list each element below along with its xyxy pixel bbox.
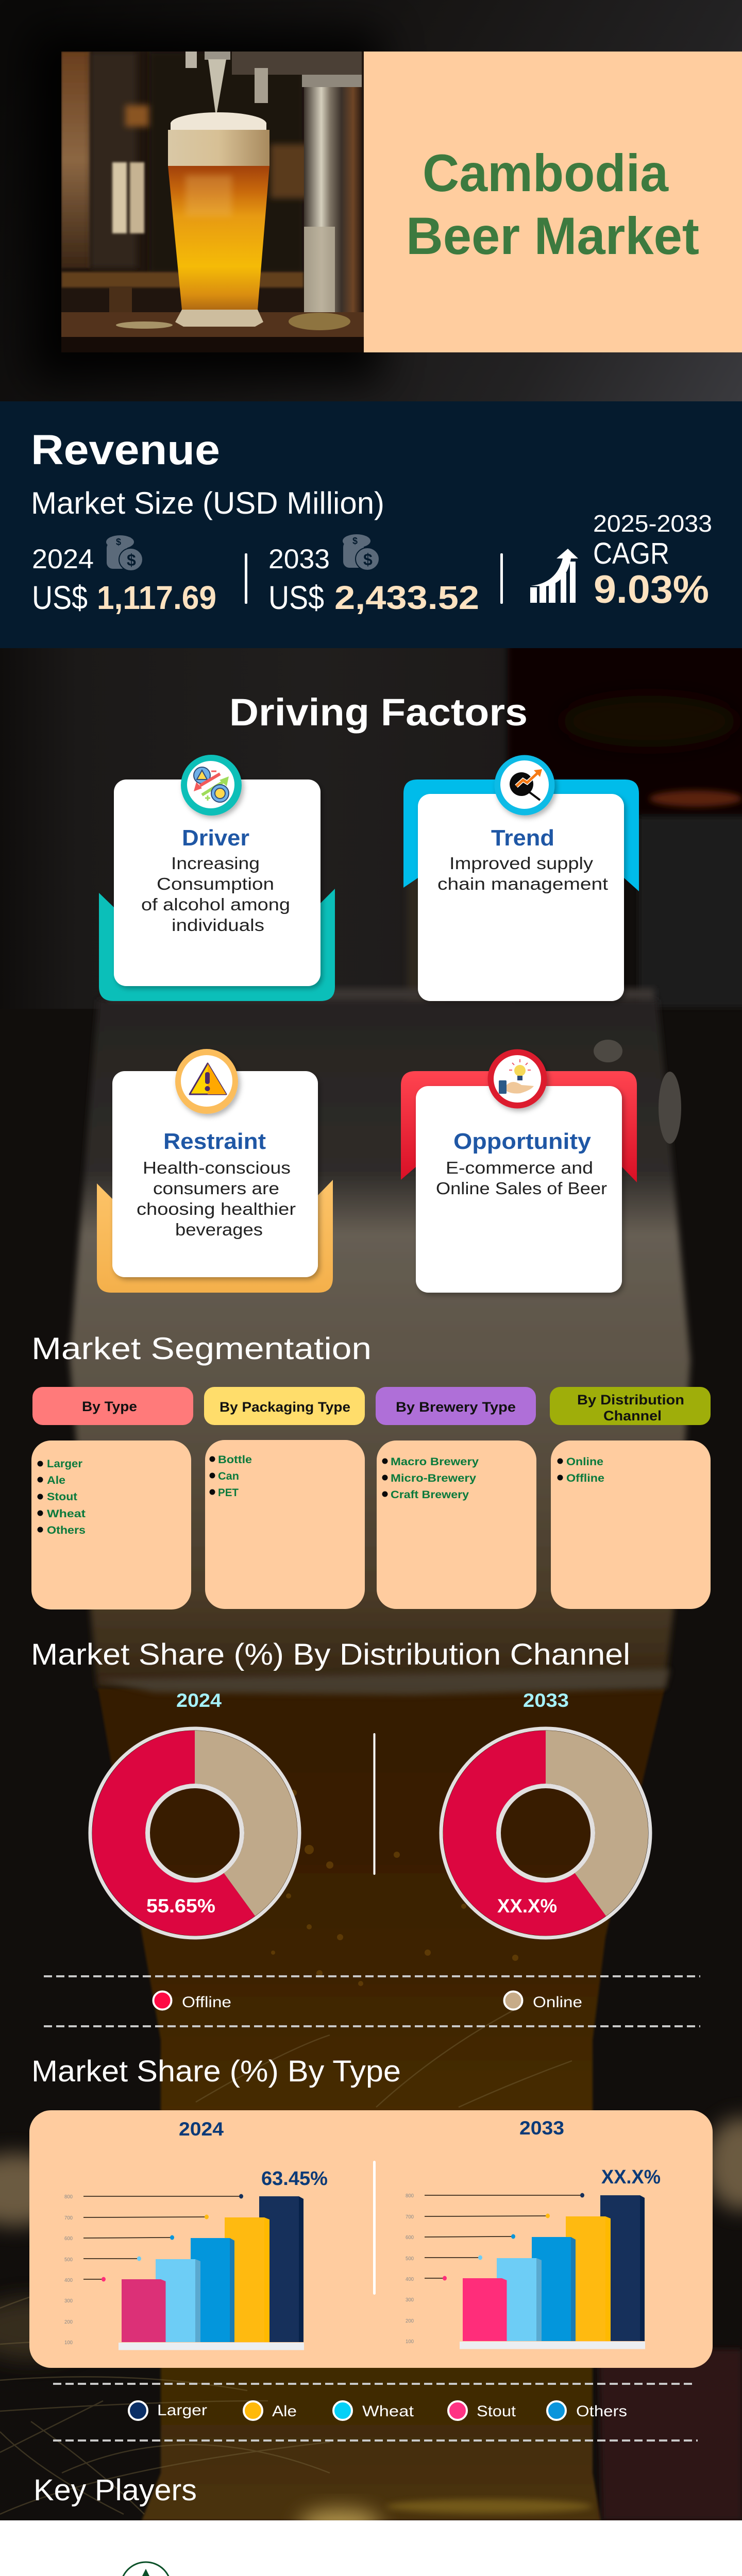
segment header: by brewery type <box>376 1387 536 1425</box>
bar chart 2033: 200 <box>406 2318 414 2324</box>
segment panel: brewery list: Micro-Brewery <box>391 1472 476 1484</box>
revenue heading: Revenue <box>31 427 220 473</box>
segment panel: distribution list: Offline <box>566 1472 604 1484</box>
segment panel: type list: Ale <box>47 1475 65 1486</box>
segment panel: brewery list: Craft Brewery <box>391 1489 469 1501</box>
legend: online <box>504 1992 582 2011</box>
legend: larger <box>129 2401 207 2420</box>
value 2033 <box>268 579 479 616</box>
bar chart 2033: XX.X% <box>601 2166 661 2188</box>
opportunity title: Opportunity <box>453 1129 592 1154</box>
donut chart 2033 <box>441 1728 650 1938</box>
segment header: by distribution channel: By Distribution <box>577 1392 684 1408</box>
legend: ale: Ale <box>272 2403 297 2420</box>
year label 2024: 2024 <box>176 1690 222 1711</box>
segment panel: brewery list: Macro Brewery <box>391 1456 479 1468</box>
legend: others <box>547 2401 627 2420</box>
year label 2033: 2033 <box>523 1690 569 1711</box>
segment panel: packaging list: PET <box>218 1487 239 1499</box>
bar chart 2033: 300 <box>406 2297 414 2303</box>
year label 2033: 2033 <box>519 2117 564 2139</box>
CAGR label: CAGR <box>593 537 669 570</box>
driver text: of alcohol among <box>141 895 290 914</box>
segment header: by type: By Type <box>82 1399 137 1414</box>
legend: offline: Offline <box>182 1994 231 2011</box>
icon: coins 2024 <box>106 535 143 571</box>
legend: larger: Larger <box>157 2402 207 2419</box>
bar chart 2024 <box>64 2168 328 2350</box>
trend text <box>437 854 608 893</box>
bar chart 2033: 500 <box>406 2256 414 2262</box>
segment header: by packaging type <box>204 1387 365 1425</box>
legend: stout: Stout <box>477 2403 516 2420</box>
title text: Beer Market: Beer Market <box>406 207 699 265</box>
logo: Cambrew <box>33 2562 259 2576</box>
icon: coins 2033 <box>343 534 379 570</box>
segment header: by type <box>32 1387 193 1425</box>
header background <box>0 0 742 401</box>
divider <box>245 553 247 604</box>
value 2024: 1,117.69 <box>97 579 216 616</box>
year 2033: 2033 <box>268 544 330 574</box>
legend: others: Others <box>576 2403 627 2420</box>
segment panel: type list: Wheat <box>47 1508 86 1520</box>
bar chart 2024: 400 <box>64 2278 73 2283</box>
restraint text <box>137 1158 296 1239</box>
trend text: Improved supply <box>449 854 594 873</box>
segment panel: distribution list <box>551 1440 711 1609</box>
restraint title: Restraint <box>163 1129 266 1154</box>
photographic background: glass and beer <box>0 639 742 2540</box>
bar chart 2024: 200 <box>64 2319 73 2325</box>
driver text <box>141 854 290 935</box>
revenue band <box>0 401 742 648</box>
CAGR period: 2025-2033 <box>593 510 712 537</box>
bar chart 2024: 63.45% <box>261 2168 328 2190</box>
bar chart 2024: 700 <box>64 2215 73 2221</box>
legend: wheat <box>333 2401 414 2420</box>
restraint text: choosing healthier <box>137 1199 296 1218</box>
icon: driver gears and arrows <box>181 755 242 816</box>
panel: opportunity <box>401 1049 637 1293</box>
segment header: by distribution channel <box>550 1387 711 1425</box>
restraint text: consumers are <box>153 1179 279 1198</box>
icon: coins 2024: $ <box>116 537 121 547</box>
bar chart 2033: 800 <box>406 2193 414 2199</box>
bar chart 2033 <box>406 2166 661 2349</box>
heading: market share by distribution channel: Market Share (%) By Distribution Channel <box>31 1638 630 1671</box>
driver text: individuals <box>172 916 264 935</box>
driver text: Increasing <box>171 854 260 873</box>
value 2033: 2,433.52 <box>334 579 479 616</box>
panel: key players logos <box>0 2520 742 2576</box>
bar chart 2024: 100 <box>64 2340 73 2346</box>
value 2024: US$ <box>32 579 88 616</box>
icon: warning triangle <box>175 1049 238 1114</box>
bar chart 2024: 600 <box>64 2236 73 2242</box>
donut chart 2024: 55.65% <box>146 1895 215 1917</box>
icon: trend magnifier <box>495 755 554 815</box>
value 2033: US$ <box>268 579 324 616</box>
icon: hand with light bulb <box>487 1049 547 1109</box>
segment panel: type list: Stout <box>47 1491 77 1503</box>
year 2024: 2024 <box>32 544 94 574</box>
legend: ale <box>244 2401 297 2420</box>
segment header: by distribution channel: Channel <box>603 1408 662 1423</box>
bar chart 2024: 500 <box>64 2257 73 2263</box>
market size label: Market Size (USD Million) <box>31 486 384 520</box>
legend: stout <box>448 2401 516 2420</box>
segment panel: packaging list: Bottle <box>218 1454 252 1466</box>
segment panel: type list: Others <box>47 1524 86 1536</box>
panel: trend <box>403 755 639 1001</box>
panel: restraint <box>97 1049 333 1293</box>
segment panel: distribution list: Online <box>566 1456 603 1468</box>
legend: offline <box>154 1992 231 2011</box>
bar chart 2033: 400 <box>406 2277 414 2282</box>
title panel <box>364 52 742 352</box>
bar chart 2024: 300 <box>64 2298 73 2304</box>
panel: market share by type <box>29 2110 713 2368</box>
restraint text: beverages <box>175 1220 263 1239</box>
opportunity text: E-commerce and <box>446 1158 593 1177</box>
restraint text: Health-conscious <box>143 1158 291 1177</box>
bar chart 2033: 100 <box>406 2339 414 2345</box>
driver text: Consumption <box>157 874 274 893</box>
segment panel: brewery list <box>377 1440 536 1609</box>
panel: driver <box>99 755 335 1001</box>
year label 2024: 2024 <box>179 2119 224 2140</box>
bar chart 2033: 700 <box>406 2214 414 2220</box>
bar chart 2033: 600 <box>406 2235 414 2241</box>
heading: driving factors: Driving Factors <box>229 691 528 734</box>
segment panel: type list <box>31 1440 191 1609</box>
CAGR value: 9.03% <box>594 568 709 612</box>
trend title: Trend <box>491 825 554 851</box>
value 2024 <box>32 579 216 616</box>
photo: beer glass under tap <box>61 52 364 352</box>
icon: coins 2033: $ <box>352 536 358 546</box>
icon: growth arrow <box>530 549 578 603</box>
segment panel: type list: Larger <box>47 1458 82 1470</box>
heading: market segmentation: Market Segmentation <box>31 1331 372 1366</box>
legend: wheat: Wheat <box>362 2403 414 2420</box>
legend: online: Online <box>533 1994 582 2011</box>
segment header: by brewery type: By Brewery Type <box>396 1399 516 1415</box>
title text: Cambodia: Cambodia <box>423 144 669 202</box>
opportunity text: Online Sales of Beer <box>436 1179 607 1198</box>
icon: coins 2033: $ <box>363 550 373 569</box>
heading: market share by type: Market Share (%) By Type <box>31 2055 401 2088</box>
donut chart 2024 <box>90 1728 299 1938</box>
divider <box>500 553 503 604</box>
segment panel: packaging list: Can <box>218 1470 239 1482</box>
donut chart 2033: XX.X% <box>497 1895 557 1917</box>
bar chart 2024: 800 <box>64 2194 73 2200</box>
opportunity text <box>436 1158 607 1198</box>
driver title: Driver <box>182 825 249 851</box>
heading: key players: Key Players <box>33 2473 197 2507</box>
segment header: by packaging type: By Packaging Type <box>220 1399 350 1415</box>
segment panel: packaging list <box>205 1440 365 1609</box>
trend text: chain management <box>437 874 608 893</box>
icon: coins 2024: $ <box>127 551 136 569</box>
